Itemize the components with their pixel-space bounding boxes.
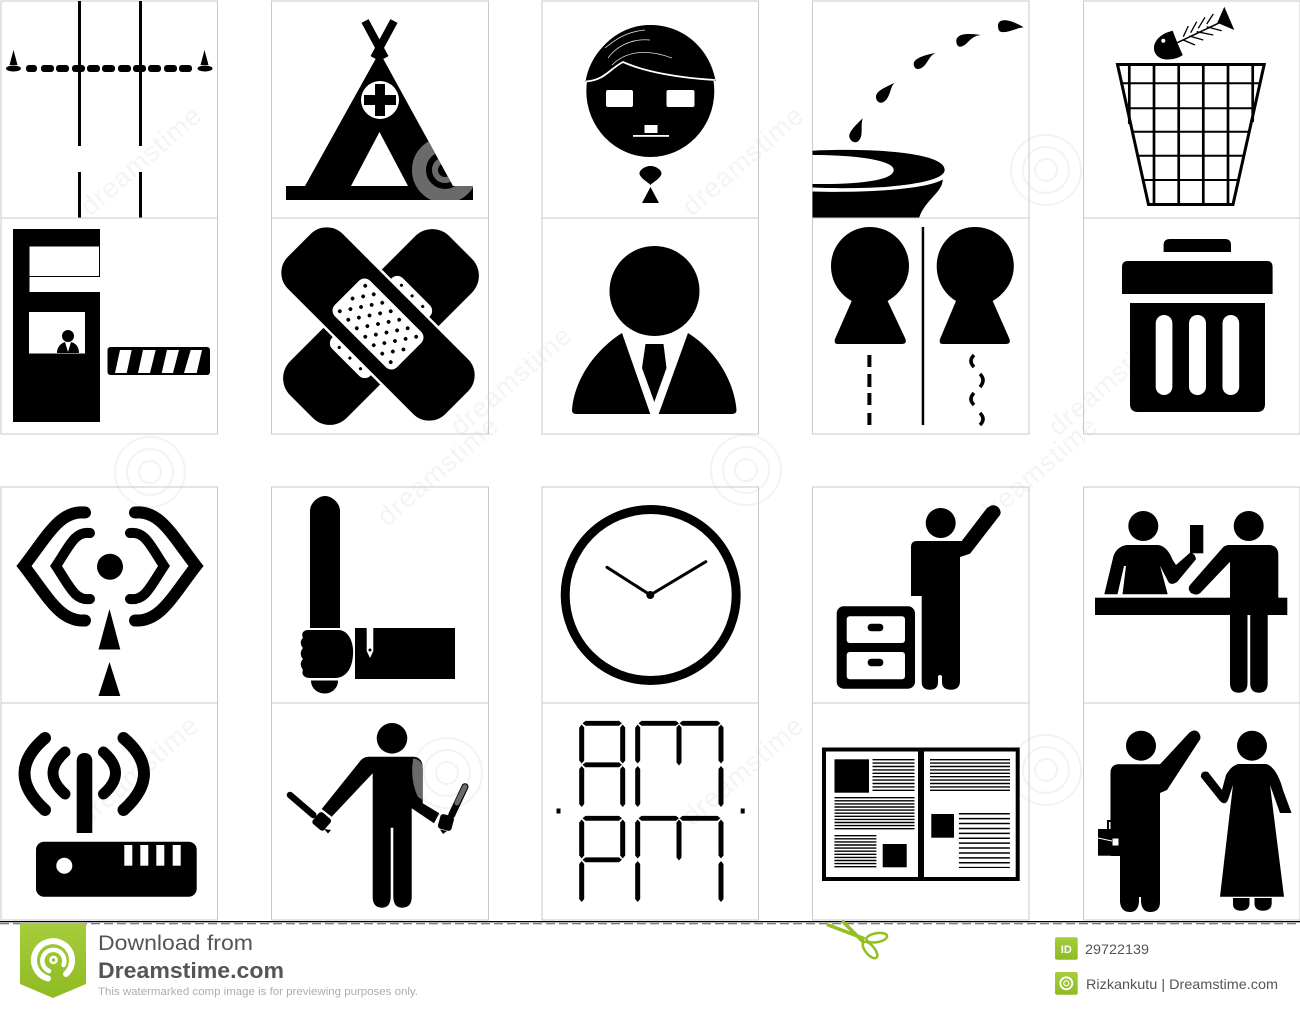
panel: wifi router bbox=[1, 703, 218, 920]
watermark layer: dreamstime bbox=[1042, 320, 1176, 442]
text: download headline: Download from bbox=[98, 932, 253, 955]
pad perforations bbox=[337, 283, 419, 365]
panel: businessman bust bbox=[542, 218, 758, 434]
panel: person at filing cabinet bbox=[812, 487, 1029, 703]
cut line bbox=[0, 921, 1300, 924]
male dashed path bbox=[867, 355, 871, 425]
watermark layer: dreamstime bbox=[676, 710, 810, 832]
icon: tie bbox=[639, 166, 662, 203]
panel: surveillance eye signal bbox=[1, 487, 218, 703]
text: download headline: This watermarked comp image is for previewing purposes only. bbox=[98, 986, 418, 998]
panel: medical tent bbox=[272, 1, 488, 218]
barrier chain bbox=[26, 65, 192, 72]
panel: AM PM digital display bbox=[542, 703, 758, 920]
AM digits bbox=[579, 721, 724, 807]
clerk bbox=[1104, 545, 1196, 594]
man bbox=[1110, 730, 1200, 912]
clock hands bbox=[607, 562, 706, 598]
panel: newspaper spread bbox=[812, 703, 1029, 920]
panel: wall clock bbox=[542, 487, 758, 703]
copyright row bbox=[1055, 972, 1278, 995]
panel: drinking fountain bbox=[812, 1, 1029, 218]
woman bbox=[1201, 764, 1292, 897]
panel: crossed bandages bbox=[270, 216, 489, 435]
traffic cones bbox=[6, 50, 212, 72]
eyes and mouth bbox=[606, 90, 694, 137]
panel: hand holding baton bbox=[272, 487, 488, 703]
basin bbox=[812, 150, 945, 188]
counter bbox=[1095, 598, 1287, 615]
female figure bbox=[937, 227, 1014, 344]
panel: waste basket with fish bones bbox=[1084, 1, 1300, 218]
icon: booth attendant bbox=[57, 330, 79, 353]
panel: smiling face with tie bbox=[542, 1, 758, 218]
image id row bbox=[1055, 937, 1149, 960]
female curved path bbox=[971, 355, 983, 425]
slots bbox=[1156, 315, 1239, 395]
image id row: ID bbox=[1061, 944, 1072, 956]
filing cabinet bbox=[837, 606, 915, 689]
text: download headline: Dreamstime.com bbox=[98, 958, 284, 983]
text: download headline bbox=[98, 932, 418, 998]
watermark layer: dreamstime bbox=[970, 410, 1104, 532]
watermark layer: dreamstime bbox=[371, 410, 505, 532]
copyright row: Rizkankutu | Dreamstime.com bbox=[1086, 976, 1278, 992]
PM digits bbox=[579, 816, 724, 902]
panel: toll booth and barrier bbox=[1, 218, 218, 434]
image id row: 29722139 bbox=[1085, 941, 1149, 957]
watermark layer: dreamstime bbox=[676, 100, 810, 222]
left page bbox=[834, 759, 907, 868]
panel: reception desk bbox=[1084, 487, 1300, 703]
panel: man and woman greeting bbox=[1084, 703, 1300, 920]
briefcase bbox=[1098, 821, 1122, 856]
icon: fish skeleton bbox=[1154, 7, 1234, 59]
necktie bbox=[642, 344, 666, 402]
fist bbox=[301, 630, 353, 678]
sleeve bbox=[355, 628, 455, 679]
panel: man with two batons bbox=[272, 703, 488, 920]
water drops bbox=[849, 20, 1024, 142]
icon: red cross badge bbox=[361, 81, 399, 119]
visitor bbox=[1189, 545, 1278, 598]
icon: scissors bbox=[828, 922, 888, 961]
right page bbox=[931, 759, 984, 868]
icon: green spiral badge bbox=[20, 923, 86, 998]
watermark layer: dreamstime bbox=[74, 100, 208, 222]
watermark layer bbox=[71, 100, 1176, 832]
watermark layer: dreamstime bbox=[444, 320, 578, 442]
male figure bbox=[831, 227, 909, 344]
panel: road closure barrier bbox=[1, 1, 218, 218]
batons and hands bbox=[290, 787, 465, 834]
icon: boom gate bbox=[108, 347, 210, 375]
panel: restrooms bbox=[812, 218, 1029, 434]
router box bbox=[36, 842, 197, 897]
panel: trash can bbox=[1084, 218, 1300, 434]
watermark layer: dreamstime bbox=[71, 710, 205, 832]
